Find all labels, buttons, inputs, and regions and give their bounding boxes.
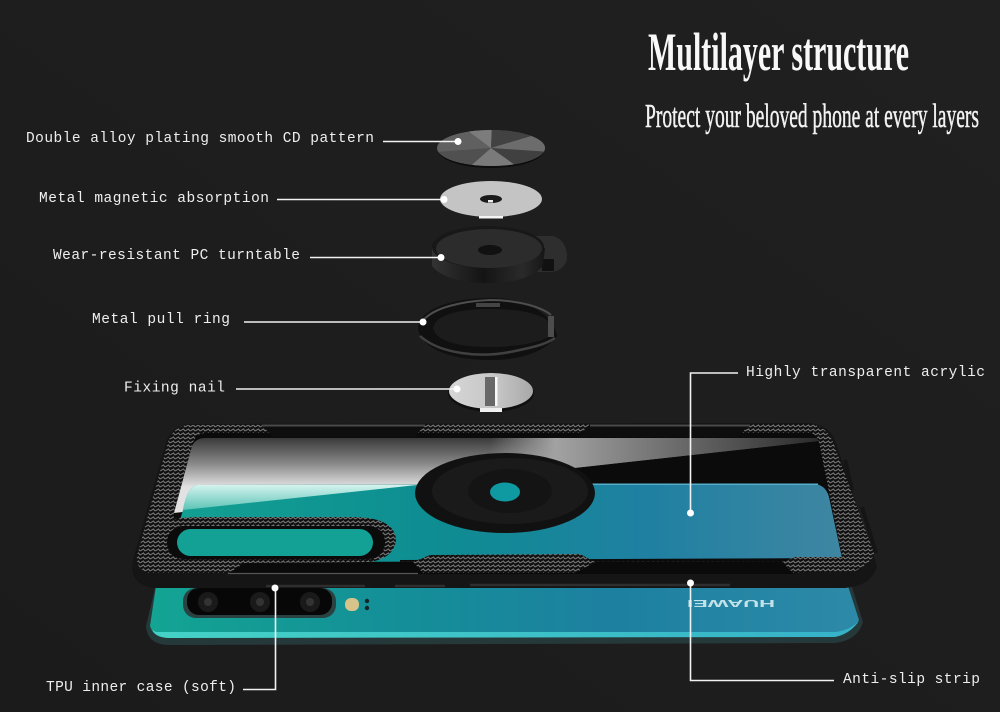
label: anti-slip strip: [687, 580, 980, 688]
lower centre carbon bump: [413, 554, 595, 573]
icon: PC turntable: [432, 226, 567, 283]
label: TPU inner case: TPU inner case (soft): [46, 680, 236, 696]
glass reflection: [174, 438, 818, 513]
camera module: [183, 588, 336, 618]
label: wear-resistant PC turntable: Wear-resistant PC turntable: [53, 248, 300, 264]
label: metal pull ring: Metal pull ring: [92, 312, 230, 328]
flash: [345, 598, 369, 611]
label: wear-resistant PC turntable: [53, 248, 444, 264]
side buttons: [845, 460, 876, 553]
label: TPU inner case: [46, 584, 278, 696]
bottom black strip: [228, 561, 843, 574]
icon: metal magnetic disc: [440, 181, 542, 218]
label: metal magnetic absorption: [39, 191, 448, 207]
teal screen seen through: [178, 484, 842, 562]
transparent phone case: [132, 423, 877, 588]
label: fixing nail: [124, 380, 460, 396]
label: double alloy plating: Double alloy plating smooth CD pattern: [26, 131, 374, 147]
label: metal pull ring: [92, 312, 426, 328]
label: highly transparent acrylic: [687, 365, 985, 516]
label: fixing nail: Fixing nail: [124, 380, 225, 396]
case outer shell: [132, 423, 877, 588]
brand logo: HUAWEI: [687, 597, 775, 608]
pill-shaped camera cut-out surround: [145, 517, 396, 573]
ring holder: [415, 453, 595, 533]
bright edge of phone: [152, 621, 859, 638]
label: anti-slip strip: Anti-slip strip: [843, 672, 980, 688]
lower-right carbon corner: [782, 557, 870, 573]
icon: fixing nail disc: [448, 373, 534, 412]
icon: metal pull ring: [418, 298, 557, 360]
phone behind case: [146, 584, 863, 645]
window black: [172, 433, 843, 562]
screen top glow: [183, 485, 417, 510]
bottom edge highlights: [228, 572, 418, 574]
label: highly transparent acrylic: Highly transparent acrylic: [746, 365, 985, 381]
top black sections: [262, 424, 425, 437]
carbon fibre frame: [137, 424, 874, 573]
label: metal magnetic absorption: Metal magnetic absorption: [39, 191, 269, 207]
icon: CD pattern disc: [437, 130, 545, 168]
